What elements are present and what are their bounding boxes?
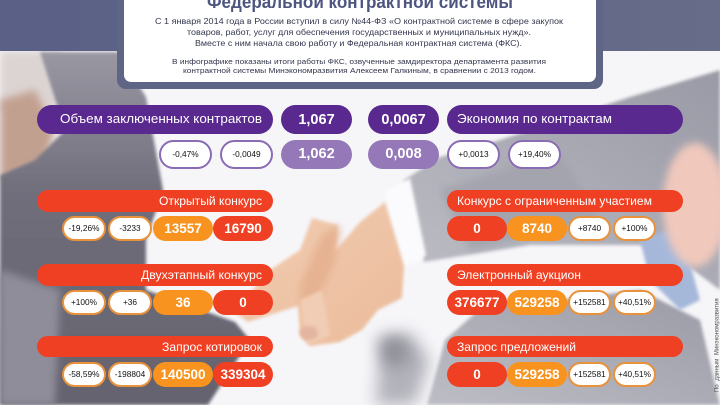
panel: request for proposals: +40,51% — [618, 369, 652, 379]
panel: two-stage tender — [37, 264, 273, 315]
panel: request for quotations: -58,59% — [69, 369, 100, 379]
panel: contract savings: +19,40% — [518, 149, 552, 159]
panel: open tender: -3233 — [119, 223, 141, 233]
panel: request for proposals — [447, 336, 683, 387]
panel: contract volume: 1,067 — [298, 112, 335, 128]
panel: contract savings: 0,008 — [385, 146, 422, 162]
panel: two-stage tender: Двухэтапный конкурс — [141, 268, 262, 282]
panel: open tender — [37, 190, 273, 241]
panel: restricted tender: 0 — [473, 221, 481, 236]
panel: two-stage tender: +100% — [71, 297, 98, 307]
panel: contract savings: +0,0013 — [458, 149, 489, 159]
panel: request for quotations: Запрос котировок — [162, 340, 263, 354]
panel: request for proposals: +152581 — [573, 369, 606, 379]
panel: request for proposals: 529258 — [514, 367, 560, 382]
intro paragraph: Вместе с ним начала свою работу и Федеральная контрактная система (ФКС). — [195, 38, 522, 48]
panel: request for quotations: 339304 — [220, 367, 266, 382]
note paragraph: контрактной системы Минэкономразвития Алексеем Галкиным, в сравнении с 2013 годом. — [183, 66, 536, 75]
header panel — [124, 0, 596, 82]
note paragraph: В инфографике показаны итоги работы ФКС, озвученные замдиректора департамента развития — [172, 57, 546, 66]
panel: open tender: -19,26% — [69, 223, 100, 233]
intro paragraph: товаров, работ, услуг для обеспечения государственных и муниципальных нужд». — [187, 27, 531, 37]
panel: contract volume — [37, 105, 352, 169]
panel: restricted tender: Конкурс с ограниченным участием — [457, 194, 652, 208]
panel: two-stage tender: +36 — [123, 297, 137, 307]
panel: restricted tender — [447, 190, 683, 241]
panel: restricted tender: +8740 — [578, 223, 602, 233]
note paragraph — [172, 57, 546, 75]
panel: request for quotations: -198804 — [115, 369, 146, 379]
intro paragraph — [155, 16, 563, 48]
panel: request for quotations — [37, 336, 273, 387]
panel: electronic auction: Электронный аукцион — [457, 268, 581, 282]
panel: two-stage tender: 0 — [239, 295, 247, 310]
panel: request for quotations: 140500 — [160, 367, 206, 382]
panel: electronic auction: +152581 — [573, 297, 606, 307]
panel: restricted tender: 8740 — [522, 221, 552, 236]
panel: contract savings: 0,0067 — [381, 112, 426, 128]
header band — [0, 0, 720, 89]
intro paragraph: С 1 января 2014 года в России вступил в силу №44-ФЗ «О контрактной системе в сфере закупок — [155, 16, 563, 26]
panel: contract volume: Объем заключенных контрактов — [60, 111, 262, 126]
panel: contract volume: -0,47% — [172, 149, 199, 159]
panel: open tender: Открытый конкурс — [159, 194, 262, 208]
panel: contract volume: -0,0049 — [232, 149, 261, 159]
panel: open tender: 13557 — [164, 221, 202, 236]
panel: open tender: 16790 — [224, 221, 262, 236]
panel: contract volume: 1,062 — [298, 146, 335, 162]
panel: electronic auction — [447, 264, 683, 315]
panel: request for proposals: 0 — [473, 367, 481, 382]
panel: electronic auction: 376677 — [454, 295, 500, 310]
panel: two-stage tender: 36 — [175, 295, 191, 310]
panel: electronic auction: 529258 — [514, 295, 560, 310]
panel: contract savings: Экономия по контрактам — [457, 111, 612, 126]
panel: restricted tender: +100% — [621, 223, 648, 233]
panel: electronic auction: +40,51% — [618, 297, 652, 307]
panel: contract savings — [368, 105, 683, 169]
panel: request for proposals: Запрос предложений — [457, 340, 576, 354]
